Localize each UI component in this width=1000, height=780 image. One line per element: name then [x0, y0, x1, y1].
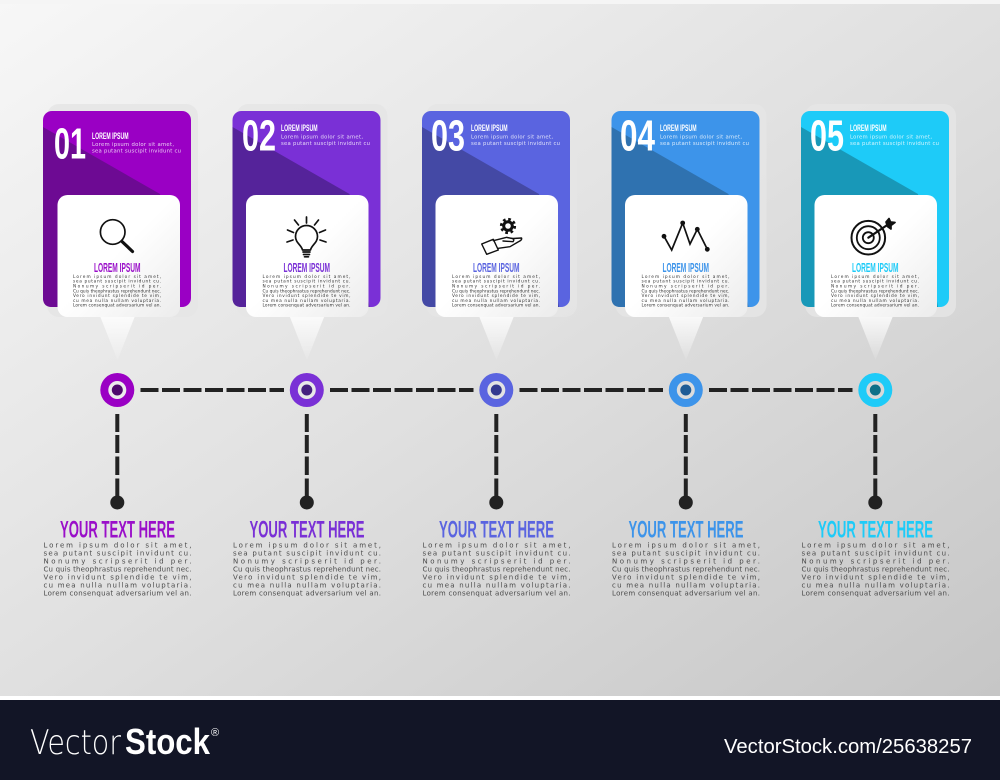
body 1: Nonumy scripserit id per. [44, 558, 192, 566]
body 3: Nonumy scripserit id per. [422, 558, 570, 566]
panel 2 dark diagonal [232, 127, 370, 307]
card 1 title: LOREM IPSUM [94, 261, 140, 275]
card 5 text: Cu quis theophrastus reprehendunt nec. [831, 288, 919, 294]
footer logo: Vector [30, 723, 121, 763]
body 2: sea putant suscipit invidunt cu. [233, 550, 381, 558]
card 4 text: Nonumy scripserit id per. [642, 284, 730, 290]
icon: zigzag chart [662, 221, 710, 252]
card 2 text: sea putant suscipit invidunt cu. [262, 279, 350, 285]
card 3 text: Lorem ipsum dolor sit amet, [452, 274, 540, 280]
card 1 text: Lorem consenquat adversarium vel an. [73, 302, 161, 308]
panel 4 header: sea putant suscipit invidunt cu [660, 141, 749, 147]
panel 5 shadow [805, 104, 956, 317]
column 3 [422, 104, 577, 598]
card 2 text: cu mea nulla nullam voluptaria. [262, 298, 350, 304]
card 2 pointer [290, 316, 324, 360]
card 1 text [73, 274, 161, 308]
card 5 text: sea putant suscipit invidunt cu. [831, 279, 919, 285]
card 1 [58, 195, 180, 317]
card 3 text [452, 274, 540, 308]
body 4: Cu quis theophrastus reprehendunt nec. [612, 566, 760, 574]
card 4 [625, 195, 748, 317]
card 3 text: Vero invidunt splendide te vim, [452, 293, 540, 299]
icon: light bulb [287, 217, 326, 257]
body 2 [233, 542, 381, 598]
panel 1 header [92, 131, 181, 154]
body 5: Nonumy scripserit id per. [802, 558, 950, 566]
panel 4 header: Lorem ipsum dolor sit amet, [660, 134, 742, 140]
panel 2 header: LOREM IPSUM [281, 123, 318, 134]
footer image id: VectorStock.com/25638257 [724, 735, 972, 758]
heading 2: YOUR TEXT HERE [250, 516, 364, 544]
body 4: cu mea nulla nullam voluptaria. [612, 582, 760, 590]
card 4 text: Vero invidunt splendide te vim, [642, 293, 730, 299]
card 4 title: LOREM IPSUM [662, 261, 709, 275]
card 5 [814, 195, 937, 317]
panel 1 header: sea putant suscipit invidunt cu [92, 148, 181, 154]
card 5 text: Lorem ipsum dolor sit amet, [831, 274, 919, 280]
panel 4 header [660, 123, 749, 147]
panel 1 header: Lorem ipsum dolor sit amet, [92, 142, 174, 148]
panel 2 header: Lorem ipsum dolor sit amet, [281, 134, 363, 140]
body 1: Lorem ipsum dolor sit amet, [44, 542, 192, 550]
card 3 text: Lorem consenquat adversarium vel an. [452, 302, 540, 308]
number 03: 03 [431, 112, 465, 160]
panel 3 [422, 111, 570, 307]
column 1 [43, 104, 198, 598]
body 5: Cu quis theophrastus reprehendunt nec. [802, 566, 950, 574]
body 2: Lorem ipsum dolor sit amet, [233, 542, 381, 550]
panel 1 dark diagonal [43, 127, 180, 307]
panel 5 header [850, 123, 939, 147]
footer logo: Stock [125, 721, 211, 762]
card 1 text: Vero invidunt splendide te vim, [73, 293, 161, 299]
card 5 text: Nonumy scripserit id per. [831, 284, 919, 290]
card 1 pointer [100, 316, 135, 360]
card 2 text: Lorem consenquat adversarium vel an. [262, 302, 350, 308]
card 4 text: sea putant suscipit invidunt cu. [642, 279, 730, 285]
panel 3 header: Lorem ipsum dolor sit amet, [471, 134, 553, 140]
card 4 text: cu mea nulla nullam voluptaria. [642, 298, 730, 304]
panel 3 shadow [426, 104, 577, 317]
card 4 pointer [668, 316, 704, 360]
body 1: sea putant suscipit invidunt cu. [44, 550, 192, 558]
card 2 [246, 195, 368, 317]
panel 3 dark diagonal [422, 127, 559, 307]
body 2: Lorem consenquat adversarium vel an. [233, 590, 381, 598]
body 4 [612, 542, 760, 598]
card 4 text: Lorem consenquat adversarium vel an. [642, 302, 730, 308]
body 3 [422, 542, 570, 598]
card 2 title: LOREM IPSUM [284, 261, 330, 275]
icon: magnifier [100, 220, 132, 252]
card 5 pointer [858, 316, 893, 360]
panel 2 [232, 111, 380, 307]
card 3 [436, 195, 558, 317]
card 3 text: sea putant suscipit invidunt cu. [452, 279, 540, 285]
body 2: Cu quis theophrastus reprehendunt nec. [233, 566, 381, 574]
node 1 [100, 373, 134, 407]
card 5 text: Lorem consenquat adversarium vel an. [831, 302, 919, 308]
card 2 text: Lorem ipsum dolor sit amet, [262, 274, 350, 280]
timeline connectors [140, 388, 852, 392]
icon: target with arrow [852, 218, 895, 254]
body 4: Vero invidunt splendide te vim, [612, 574, 760, 582]
body 1: cu mea nulla nullam voluptaria. [44, 582, 191, 590]
body 2: cu mea nulla nullam voluptaria. [233, 582, 381, 590]
footer logo [30, 721, 219, 763]
card 3 text: Cu quis theophrastus reprehendunt nec. [452, 288, 540, 294]
body 3: Lorem ipsum dolor sit amet, [422, 542, 570, 550]
panel 4 dark diagonal [612, 127, 748, 307]
card 1 text: Lorem ipsum dolor sit amet, [73, 274, 161, 280]
card 4 text: Lorem ipsum dolor sit amet, [642, 274, 730, 280]
footer logo: ® [211, 727, 219, 739]
body 4: Nonumy scripserit id per. [612, 558, 760, 566]
card 5 title: LOREM IPSUM [852, 261, 898, 275]
body 1: Vero invidunt splendide te vim, [44, 574, 192, 582]
panel 3 header [471, 123, 560, 147]
stem 3 [489, 414, 503, 510]
body 1: Lorem consenquat adversarium vel an. [44, 590, 192, 598]
body 1 [44, 542, 192, 598]
card 1 text: Nonumy scripserit id per. [73, 284, 161, 290]
body 5: cu mea nulla nullam voluptaria. [802, 582, 949, 590]
icon: hand with gear [482, 219, 522, 254]
card 4 text: Cu quis theophrastus reprehendunt nec. [642, 288, 730, 294]
panel 1 header: LOREM IPSUM [92, 131, 129, 142]
body 3: Cu quis theophrastus reprehendunt nec. [422, 566, 570, 574]
stem 4 [679, 414, 693, 510]
body 5 [802, 542, 950, 598]
top strip [0, 0, 1000, 4]
node 4 [669, 373, 703, 407]
stem 5 [868, 414, 882, 510]
panel 5 dark diagonal [801, 127, 938, 307]
card 5 text: cu mea nulla nullam voluptaria. [831, 298, 919, 304]
column 2 [232, 104, 388, 598]
heading 3: YOUR TEXT HERE [439, 516, 554, 544]
body 2: Nonumy scripserit id per. [233, 558, 381, 566]
panel 1 shadow [47, 104, 198, 317]
panel 5 header: sea putant suscipit invidunt cu [850, 141, 939, 147]
number 02: 02 [242, 112, 276, 160]
body 1: Cu quis theophrastus reprehendunt nec. [44, 566, 192, 574]
panel 3 header: sea putant suscipit invidunt cu [471, 141, 560, 147]
card 2 text: Cu quis theophrastus reprehendunt nec. [262, 288, 350, 294]
card 5 text: Vero invidunt splendide te vim, [831, 293, 919, 299]
node 3 [479, 373, 513, 407]
body 4: sea putant suscipit invidunt cu. [612, 550, 760, 558]
card 1 text: Cu quis theophrastus reprehendunt nec. [73, 288, 161, 294]
heading 4: YOUR TEXT HERE [628, 516, 744, 544]
column 4 [612, 104, 766, 598]
number 05: 05 [810, 112, 844, 160]
stem 2 [300, 414, 314, 510]
card 3 title: LOREM IPSUM [473, 261, 520, 275]
panel 2 header: sea putant suscipit invidunt cu [281, 141, 370, 147]
panel 1 [43, 111, 191, 307]
footer bar [0, 700, 1000, 780]
body 4: Lorem consenquat adversarium vel an. [612, 590, 760, 598]
card 3 text: cu mea nulla nullam voluptaria. [452, 298, 540, 304]
panel 4 header: LOREM IPSUM [660, 123, 697, 134]
body 4: Lorem ipsum dolor sit amet, [612, 542, 760, 550]
panel 4 shadow [616, 104, 766, 317]
card 2 text: Vero invidunt splendide te vim, [262, 293, 350, 299]
stem 1 [110, 414, 124, 510]
card 4 text [642, 274, 730, 308]
card 5 text [831, 274, 919, 308]
panel 2 header [281, 123, 370, 147]
body 5: Lorem ipsum dolor sit amet, [802, 542, 950, 550]
column 5 [801, 104, 956, 598]
panel 5 header: LOREM IPSUM [850, 123, 887, 134]
body 3: cu mea nulla nullam voluptaria. [422, 582, 570, 590]
body 3: sea putant suscipit invidunt cu. [422, 550, 570, 558]
card 2 text [262, 274, 350, 308]
panel 5 [801, 111, 949, 307]
body 3: Lorem consenquat adversarium vel an. [422, 590, 570, 598]
body 2: Vero invidunt splendide te vim, [233, 574, 381, 582]
heading 1: YOUR TEXT HERE [60, 516, 175, 544]
body 5: Vero invidunt splendide te vim, [802, 574, 950, 582]
node 5 [858, 373, 892, 407]
body 5: sea putant suscipit invidunt cu. [802, 550, 950, 558]
panel 4 [612, 111, 760, 307]
panel 3 header: LOREM IPSUM [471, 123, 508, 134]
body 3: Vero invidunt splendide te vim, [422, 574, 570, 582]
card 3 pointer [479, 316, 514, 360]
card 2 text: Nonumy scripserit id per. [262, 284, 350, 290]
body 5: Lorem consenquat adversarium vel an. [802, 590, 950, 598]
number 01: 01 [54, 120, 86, 168]
panel 2 shadow [236, 104, 388, 317]
card 3 text: Nonumy scripserit id per. [452, 284, 540, 290]
panel 5 header: Lorem ipsum dolor sit amet, [850, 134, 932, 140]
number 04: 04 [620, 112, 655, 160]
card 1 text: cu mea nulla nullam voluptaria. [73, 298, 161, 304]
node 2 [290, 373, 324, 407]
card 1 text: sea putant suscipit invidunt cu. [73, 279, 161, 285]
